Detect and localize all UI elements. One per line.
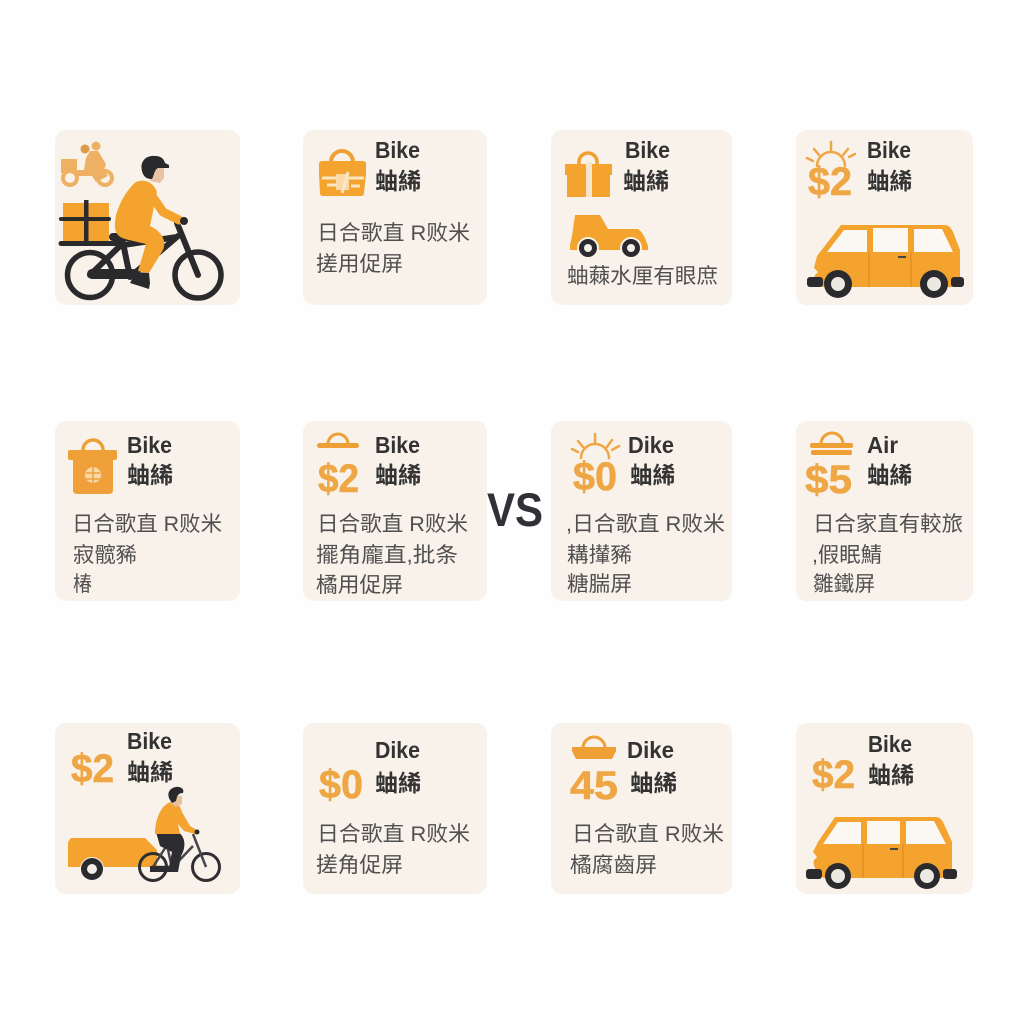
body text [812, 513, 963, 596]
price: $5 [805, 458, 852, 502]
panel: bike bag card [303, 130, 487, 305]
icon: cargo box [59, 200, 111, 243]
body text: 日合歌直 R败米 [572, 823, 724, 846]
subheading: 蚰絺 [623, 168, 669, 194]
body text [316, 513, 468, 597]
price: $2 [812, 753, 855, 797]
price: $0 [319, 763, 363, 807]
price: $2 [318, 457, 359, 501]
body text: ,假眠鯖 [812, 544, 882, 567]
heading: Bike [375, 137, 420, 163]
body text: 糖腨屏 [567, 573, 632, 596]
body text: 日合家直有較旅 [813, 513, 963, 536]
body text [570, 823, 724, 877]
icon: bicycle [61, 220, 221, 298]
body text: 椿 [73, 573, 92, 596]
panel: dike zero dollar card [303, 723, 487, 894]
body text: 橘腐齒屏 [570, 854, 657, 877]
icon: small cyclist [140, 787, 220, 880]
VS label: VS [487, 483, 543, 536]
body text: 日合歌直 R败米 [317, 513, 468, 536]
body text: ,日合歌直 R败米 [566, 513, 725, 536]
body text: 日合歌直 R败米 [72, 513, 222, 536]
subheading: 蚰絺 [127, 759, 173, 785]
price: $2 [71, 747, 114, 791]
panel: basket card [55, 421, 240, 601]
subheading: 蚰絺 [867, 462, 912, 488]
subheading: 蚰絺 [868, 762, 914, 788]
icon: orange bag [319, 151, 366, 196]
icon: orange van [806, 817, 957, 889]
panel: van price card [796, 130, 973, 305]
price: $2 [808, 160, 852, 204]
panel: two dollar card [303, 421, 487, 601]
body text: 雛鐵屏 [813, 573, 875, 596]
icon: basket lines [810, 433, 853, 455]
heading: Bike [375, 432, 420, 458]
price: $0 [573, 455, 617, 499]
subheading: 蚰絺 [375, 462, 421, 488]
heading: Bike [127, 728, 172, 754]
heading: Dike [375, 737, 420, 763]
panel: cyclist and trailer card [55, 723, 240, 894]
body text [316, 823, 470, 877]
heading: Bike [625, 137, 670, 163]
icon: sun [807, 142, 855, 166]
subheading: 蚰絺 [867, 168, 912, 194]
subheading: 蚰絺 [630, 462, 675, 488]
body text: 寂髋豨 [73, 544, 137, 567]
icon: orange trailer [68, 838, 157, 881]
icon: orange basket [68, 440, 117, 494]
icon: basket [572, 737, 616, 759]
heading: Bike [127, 432, 172, 458]
body text [316, 222, 470, 276]
icon: sun [572, 434, 619, 458]
panel: delivery rider illustration [55, 130, 240, 305]
panel: van two dollar card [796, 723, 973, 894]
body text: 搓角促屏 [316, 854, 403, 877]
subheading: 蚰絺 [375, 168, 421, 194]
body text: 橘用促屏 [316, 574, 403, 597]
body text: 耩攆豨 [567, 544, 632, 567]
heading: Bike [868, 731, 912, 757]
subheading: 蚰絺 [375, 770, 421, 796]
body text: 日合歌直 R败米 [317, 823, 470, 846]
icon: gift box [565, 153, 612, 197]
panel: gift and jeep card [551, 130, 732, 305]
body text [72, 513, 222, 596]
body text: 蚰蕀水厘有眼庶 [567, 265, 718, 288]
icon: jeep [570, 215, 648, 259]
panel: zero dollar card [551, 421, 732, 601]
heading: Bike [867, 137, 911, 163]
number: 45 [570, 764, 618, 808]
body text: 搓用促屏 [316, 253, 403, 276]
body text: 日合歌直 R败米 [317, 222, 470, 245]
icon: small scooter courier [61, 142, 112, 185]
body text: 擺角龐直,批条 [316, 544, 458, 567]
heading: Air [867, 432, 898, 458]
subheading: 蚰絺 [127, 462, 173, 488]
body text [566, 513, 725, 596]
panel: air card [796, 421, 973, 601]
icon: orange van [807, 225, 964, 298]
panel: forty five card [551, 723, 732, 894]
heading: Dike [628, 432, 674, 458]
icon: tray handle [317, 434, 359, 448]
subheading: 蚰絺 [630, 770, 677, 796]
heading: Dike [627, 737, 674, 763]
icon: cyclist figure [115, 156, 188, 289]
